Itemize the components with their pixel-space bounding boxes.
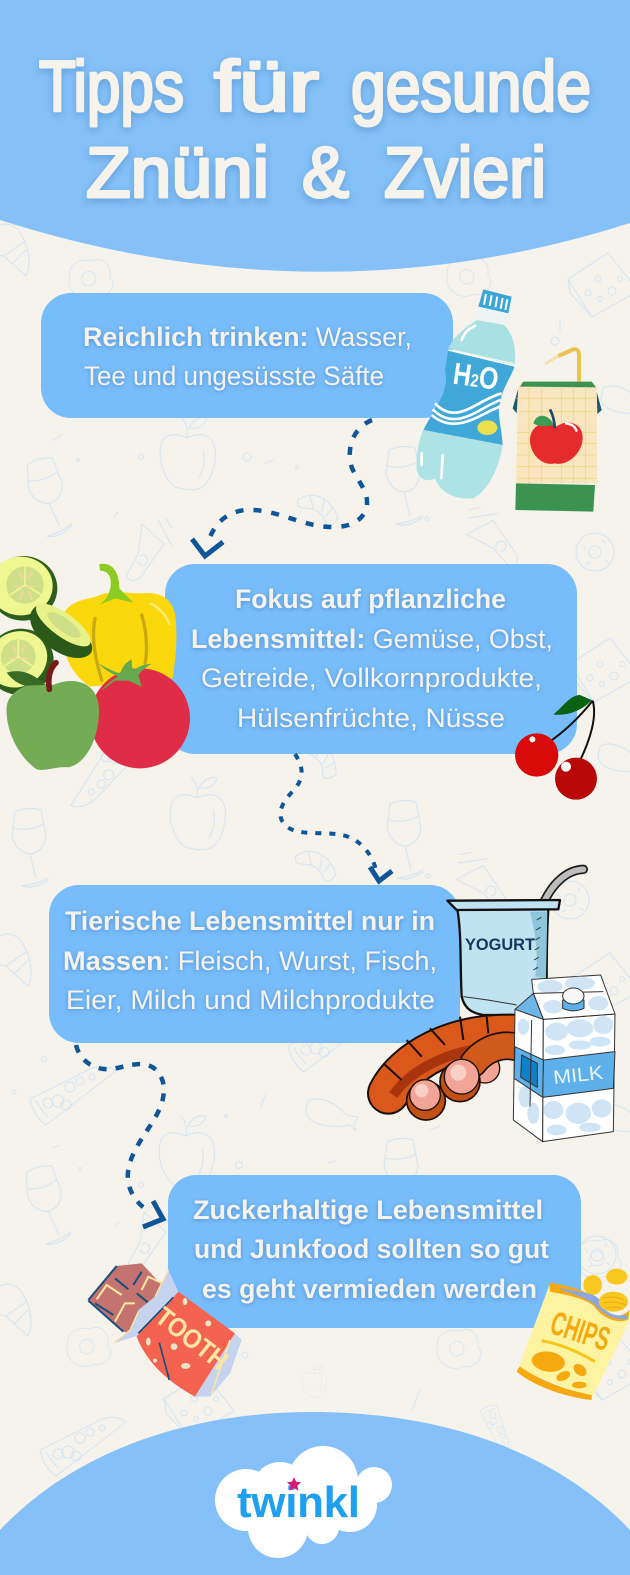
icon: chips bag [517, 1269, 630, 1400]
icon: vegetables and apple [0, 556, 190, 770]
panel 1 text [83, 322, 412, 391]
chocolate wrapper [137, 1292, 235, 1397]
icon: cherries [515, 695, 597, 800]
panel 2 text: Hülsenfrüchte, Nüsse [237, 703, 505, 733]
panel 1: drinks [41, 293, 453, 418]
yogurt label: YOGURT [465, 935, 535, 954]
panel 2 text: Fokus auf pflanzliche [235, 584, 506, 614]
panel 3 text: Eier, Milch und Milchprodukte [66, 985, 435, 1015]
title [39, 48, 591, 213]
panel 1 text: Tee und ungesüsste Säfte [84, 361, 384, 391]
logo star [287, 1477, 301, 1491]
bottle label: H2O [451, 357, 501, 397]
icon: chocolate bar: TOOTH [150, 1301, 234, 1376]
title: & [302, 134, 349, 213]
panel 1 text: Reichlich trinken: Wasser, [83, 322, 412, 352]
header band [0, 0, 630, 272]
twinkl logo [215, 1446, 392, 1558]
panel 3: animal foods [49, 885, 460, 1043]
icon: water bottle [417, 289, 515, 499]
panel 2 text [191, 584, 553, 733]
panel 4 text: es geht vermieden werden [202, 1274, 537, 1304]
background food doodle pattern [0, 224, 630, 1476]
title: Zvieri [384, 134, 546, 213]
cucumber slices [0, 556, 97, 707]
icon: chocolate bar [88, 1263, 242, 1397]
icon: juice box [513, 349, 602, 512]
panel 4 text: und Junkfood sollten so gut [194, 1234, 549, 1264]
milk label: MILK [552, 1063, 604, 1089]
icon: yogurt pot [447, 869, 583, 1015]
panel 2 text: Lebensmittel: Gemüse, Obst, [191, 624, 553, 654]
green apple [7, 663, 99, 770]
arrow 3 [76, 1045, 164, 1227]
panel 4 text [193, 1195, 549, 1304]
logo cloud [215, 1446, 392, 1558]
yellow pepper [63, 592, 176, 687]
panel 4 text: Zuckerhaltige Lebensmittel [193, 1195, 543, 1225]
panel 3 text: Tierische Lebensmittel nur in [65, 906, 435, 936]
logo wordmark: twinkl [237, 1478, 360, 1527]
panel 3 text [63, 906, 437, 1015]
arrow 1 [192, 420, 372, 556]
panel 4: sugar and junk food [168, 1175, 581, 1328]
title: Tipps [39, 48, 184, 127]
footer band [0, 1412, 630, 1575]
tomato [90, 668, 190, 768]
panel 2: plant foods [165, 564, 577, 754]
icon: sausages [383, 1017, 515, 1120]
panel 2 text: Getreide, Vollkornprodukte, [201, 663, 542, 693]
panel 3 text: Massen: Fleisch, Wurst, Fisch, [63, 946, 437, 976]
arrow 2 [280, 754, 392, 881]
title: Znüni [86, 134, 269, 213]
title: gesunde [351, 48, 591, 127]
title: für [214, 48, 319, 127]
icon: milk carton [513, 975, 615, 1142]
